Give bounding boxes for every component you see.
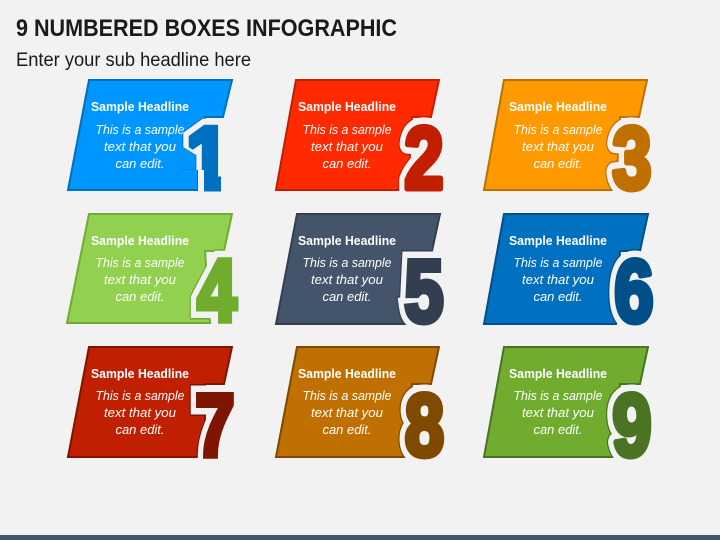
- text block 5: [298, 233, 396, 304]
- number 2: 2: [404, 109, 444, 207]
- text block 7: text that you: [104, 405, 176, 420]
- number 9: 9: [612, 376, 652, 474]
- text block 3: text that you: [522, 139, 594, 154]
- text block 9: [509, 366, 607, 437]
- panel: box 2: 2: [404, 109, 444, 207]
- panel: box 4: 4: [197, 241, 237, 340]
- text block 8: This is a sample: [302, 388, 392, 403]
- footer bar: [0, 535, 720, 540]
- text block 6: Sample Headline: [509, 233, 607, 248]
- text block 2: This is a sample: [302, 122, 392, 137]
- number 3: 3: [612, 109, 652, 207]
- text block 9: can edit.: [534, 422, 582, 437]
- text block 2: text that you: [311, 139, 383, 154]
- panel: box 1: 1: [186, 109, 230, 207]
- text block 1: can edit.: [116, 156, 164, 171]
- text block 2: Sample Headline: [298, 99, 396, 114]
- number 4: 4: [197, 241, 237, 340]
- text block 6: can edit.: [534, 289, 582, 304]
- text block 7: Sample Headline: [91, 366, 189, 381]
- number 1: 1: [186, 109, 230, 207]
- text block 7: [91, 366, 189, 437]
- panel: box 7: 7: [195, 376, 235, 475]
- panel: box 6: 6: [614, 242, 654, 340]
- text block 5: text that you: [311, 272, 383, 287]
- subtitle: Enter your sub headline here: [16, 50, 251, 71]
- text block 4: [91, 233, 189, 304]
- panel: box 5: 5: [404, 242, 444, 340]
- panel: box 9: 9: [612, 376, 652, 474]
- text block 1: text that you: [104, 139, 176, 154]
- panel: box 1: 1: [186, 109, 230, 207]
- panel: box 3: 3: [612, 109, 652, 207]
- text block 8: can edit.: [322, 422, 372, 437]
- panel: box 2: [274, 79, 444, 192]
- panel: box 8: 8: [405, 376, 444, 474]
- text block 5: Sample Headline: [298, 233, 396, 248]
- text block 2: [298, 99, 396, 171]
- text block 1: [91, 99, 189, 171]
- panel: box 7: 7: [195, 376, 235, 475]
- panel: box 3: [482, 79, 652, 192]
- number 5: 5: [404, 242, 444, 340]
- panel: box 2: 2: [404, 109, 444, 207]
- text block 5: can edit.: [322, 289, 372, 304]
- text block 2: can edit.: [322, 156, 372, 171]
- panel: box 6: [482, 213, 654, 326]
- panel: box 9: 9: [612, 376, 652, 474]
- text block 4: can edit.: [116, 289, 164, 304]
- panel: box 8: [276, 347, 444, 474]
- text block 5: This is a sample: [302, 255, 392, 270]
- panel: box 4: [67, 214, 237, 340]
- text block 3: [509, 99, 607, 171]
- panel: box 4: 4: [197, 241, 237, 340]
- panel: box 8: 8: [405, 376, 444, 474]
- text block 3: This is a sample: [514, 122, 602, 137]
- text block 1: Sample Headline: [91, 99, 189, 114]
- panel: box 5: 5: [404, 242, 444, 340]
- text block 4: Sample Headline: [91, 233, 189, 248]
- text block 9: Sample Headline: [509, 366, 607, 381]
- text block 3: Sample Headline: [509, 99, 607, 114]
- panel: box 9: [482, 346, 652, 460]
- panel: box 1: [66, 79, 234, 192]
- panel: box 5: [276, 214, 444, 340]
- text block 7: This is a sample: [96, 388, 184, 403]
- text block 8: Sample Headline: [298, 366, 396, 381]
- text block 4: This is a sample: [96, 255, 184, 270]
- title: 9 NUMBERED BOXES INFOGRAPHIC: [16, 15, 397, 42]
- text block 3: can edit.: [534, 156, 582, 171]
- text block 1: This is a sample: [96, 122, 184, 137]
- number 7: 7: [195, 376, 235, 475]
- text block 4: text that you: [104, 272, 176, 287]
- number 8: 8: [405, 376, 444, 474]
- text block 6: [509, 233, 607, 304]
- number 6: 6: [614, 242, 654, 340]
- text block 6: This is a sample: [514, 255, 602, 270]
- panel: box 6: 6: [614, 242, 654, 340]
- text block 9: This is a sample: [514, 388, 602, 403]
- panel: box 7: [66, 346, 234, 459]
- text block 9: text that you: [522, 405, 594, 420]
- text block 8: text that you: [311, 405, 383, 420]
- text block 6: text that you: [522, 272, 594, 287]
- text block 8: [298, 366, 396, 437]
- panel: box 3: 3: [612, 109, 652, 207]
- text block 7: can edit.: [116, 422, 164, 437]
